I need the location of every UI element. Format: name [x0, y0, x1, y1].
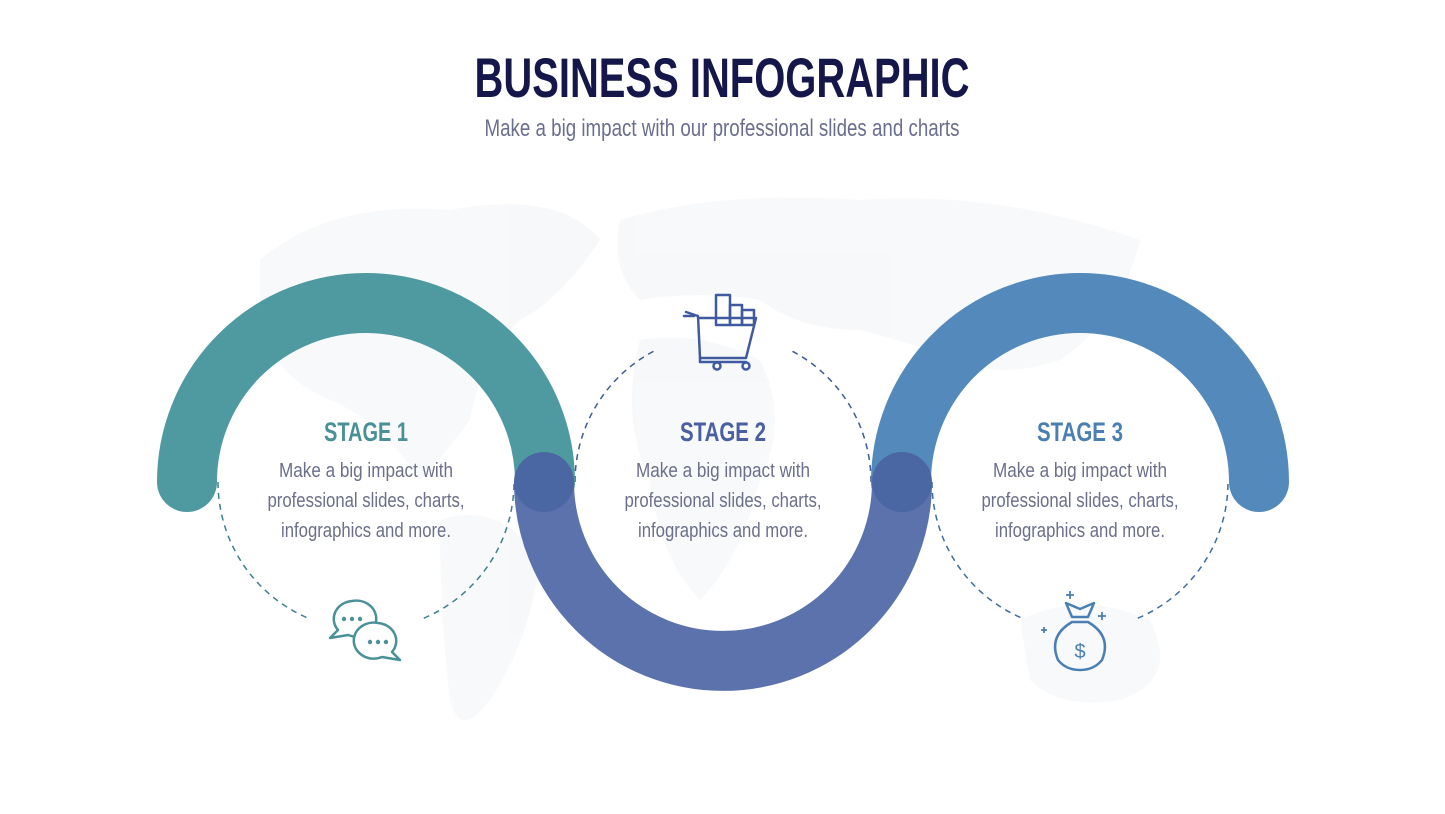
stage 3 text: STAGE 3: [1037, 417, 1123, 447]
stage 1 text: infographics and more.: [281, 520, 451, 542]
dashed circle stage 1: [218, 482, 514, 618]
stage 3 text: professional slides, charts,: [982, 490, 1178, 512]
stage 2 text: Make a big impact with: [636, 460, 810, 482]
stage 2 text: [624, 417, 822, 542]
arc stage 2: [544, 482, 902, 661]
stage 1 text: [268, 417, 464, 542]
icon: money bag: [1041, 591, 1106, 670]
stage 3 text: infographics and more.: [995, 520, 1165, 542]
dashed circle stage 2: [575, 351, 871, 482]
icon: chat bubbles: [330, 601, 400, 660]
joint circles: [514, 452, 932, 512]
title: BUSINESS INFOGRAPHIC: [474, 46, 970, 109]
arc stage 3: [901, 303, 1259, 482]
subtitle: Make a big impact with our professional slides and charts: [484, 115, 960, 142]
stage 1 text: STAGE 1: [324, 417, 408, 447]
stage 3 text: Make a big impact with: [993, 460, 1167, 482]
stage 2 text: STAGE 2: [680, 417, 766, 447]
stage 1 text: professional slides, charts,: [268, 490, 464, 512]
stage 2 text: infographics and more.: [638, 520, 808, 542]
stage 1 text: Make a big impact with: [279, 460, 453, 482]
icon: shopping cart: [684, 295, 756, 370]
background world map: [260, 198, 1160, 720]
arc stage 1: [187, 303, 545, 482]
stage 2 text: professional slides, charts,: [624, 490, 822, 512]
icon: money bag: $: [1074, 641, 1086, 663]
stage 3 text: [982, 417, 1178, 542]
dashed circle stage 3: [932, 482, 1228, 618]
